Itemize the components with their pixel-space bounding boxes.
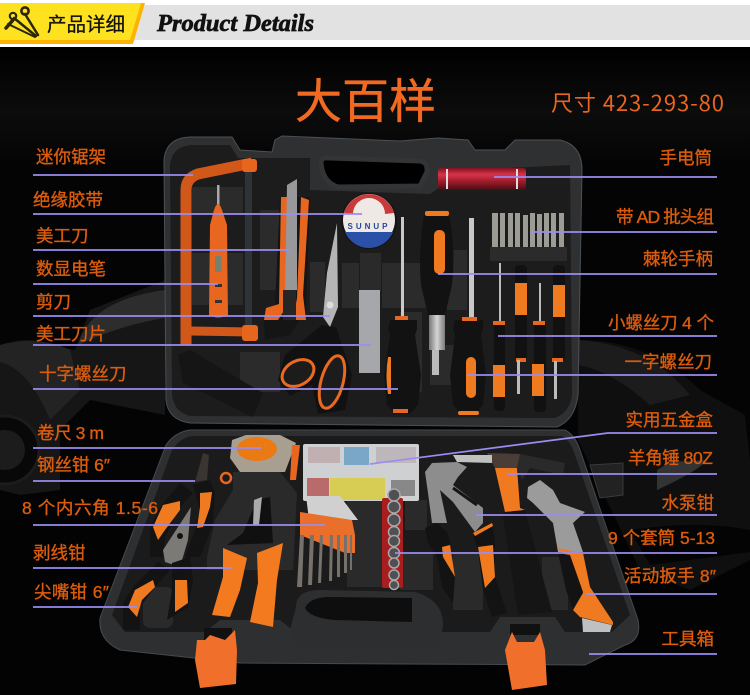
label: 工具箱: 工具箱	[662, 629, 714, 649]
label: 活动扳手	[586, 566, 717, 594]
label: 绝缘胶带: 绝缘胶带	[33, 190, 103, 210]
label: 9个套筒: 9 个套筒 5-13	[608, 528, 715, 548]
flashlight	[438, 168, 526, 190]
label: 尖嘴钳: 尖嘴钳 6″	[34, 582, 109, 602]
label: 羊角锤: 羊角锤 80Z	[628, 448, 713, 468]
case handle	[290, 590, 443, 648]
right latch	[505, 624, 547, 690]
label: 迷你锯架: 迷你锯架	[36, 147, 106, 167]
label: 一字螺丝刀: 一字螺丝刀	[624, 352, 712, 372]
bit set	[490, 213, 567, 261]
label: 8个内六角: 8 个内六角 1.5-6	[22, 498, 158, 518]
background car right	[578, 340, 750, 590]
header title english: Product Details	[156, 11, 314, 37]
base moldings	[207, 472, 568, 610]
icon: crossed tools	[6, 7, 38, 37]
left latch	[195, 628, 237, 688]
small screwdrivers	[493, 263, 565, 412]
label: 钢丝钳: 钢丝钳 6″	[37, 455, 110, 475]
label: 棘轮手柄: 棘轮手柄	[643, 249, 713, 269]
blade pack	[359, 253, 381, 373]
label: 手电筒: 手电筒	[660, 148, 712, 168]
background car left	[0, 280, 165, 495]
parts box	[303, 444, 419, 501]
header band	[0, 0, 750, 47]
saw	[178, 159, 263, 417]
case handle opening	[321, 158, 427, 187]
water pump pliers	[425, 462, 507, 617]
label: 水泵钳: 水泵钳	[662, 493, 714, 513]
electrical tape	[341, 193, 397, 249]
electrical tape: SUNUP	[347, 222, 391, 231]
lid moldings	[192, 187, 467, 392]
label: 实用五金盒	[370, 410, 717, 464]
label: 卷尺: 卷尺 3 m	[37, 423, 104, 443]
combination pliers	[150, 453, 215, 557]
title: 大百样	[295, 63, 436, 132]
wire stripper	[212, 497, 283, 627]
label: 美工刀: 美工刀	[36, 226, 88, 246]
label: 剥线钳: 剥线钳	[33, 543, 86, 563]
adjustable wrench	[527, 480, 613, 632]
label: 工具箱	[589, 629, 717, 654]
voltage pen	[209, 185, 228, 318]
panel: case base	[100, 430, 639, 690]
label: 带AD批头组: 带 AD 批头组	[616, 207, 714, 227]
socket set	[382, 489, 403, 590]
hex key set	[297, 496, 358, 587]
label: 实用五金盒: 实用五金盒	[626, 410, 713, 430]
slot screwdriver	[450, 218, 486, 415]
label: 活动扳手: 活动扳手 8″	[624, 566, 716, 586]
utility knife	[264, 179, 310, 340]
cross screwdriver	[384, 217, 421, 414]
label: 尖嘴钳	[33, 582, 137, 607]
label: 小螺丝刀: 小螺丝刀 4 个	[608, 313, 714, 333]
claw hammer	[453, 453, 565, 615]
panel: open case lid	[164, 136, 582, 427]
long nose pliers	[123, 507, 193, 630]
label: 剪刀: 剪刀	[36, 292, 71, 312]
scissors	[277, 223, 352, 414]
ratchet handle	[420, 211, 453, 375]
tape measure	[221, 435, 300, 483]
label: 数显电笔: 数显电笔	[36, 259, 106, 279]
label: 美工刀片: 美工刀片	[36, 324, 106, 344]
header title chinese: 产品详细	[47, 8, 125, 37]
label: 十字螺丝刀: 十字螺丝刀	[39, 364, 126, 384]
size text: 尺寸 423-293-80	[551, 86, 724, 118]
